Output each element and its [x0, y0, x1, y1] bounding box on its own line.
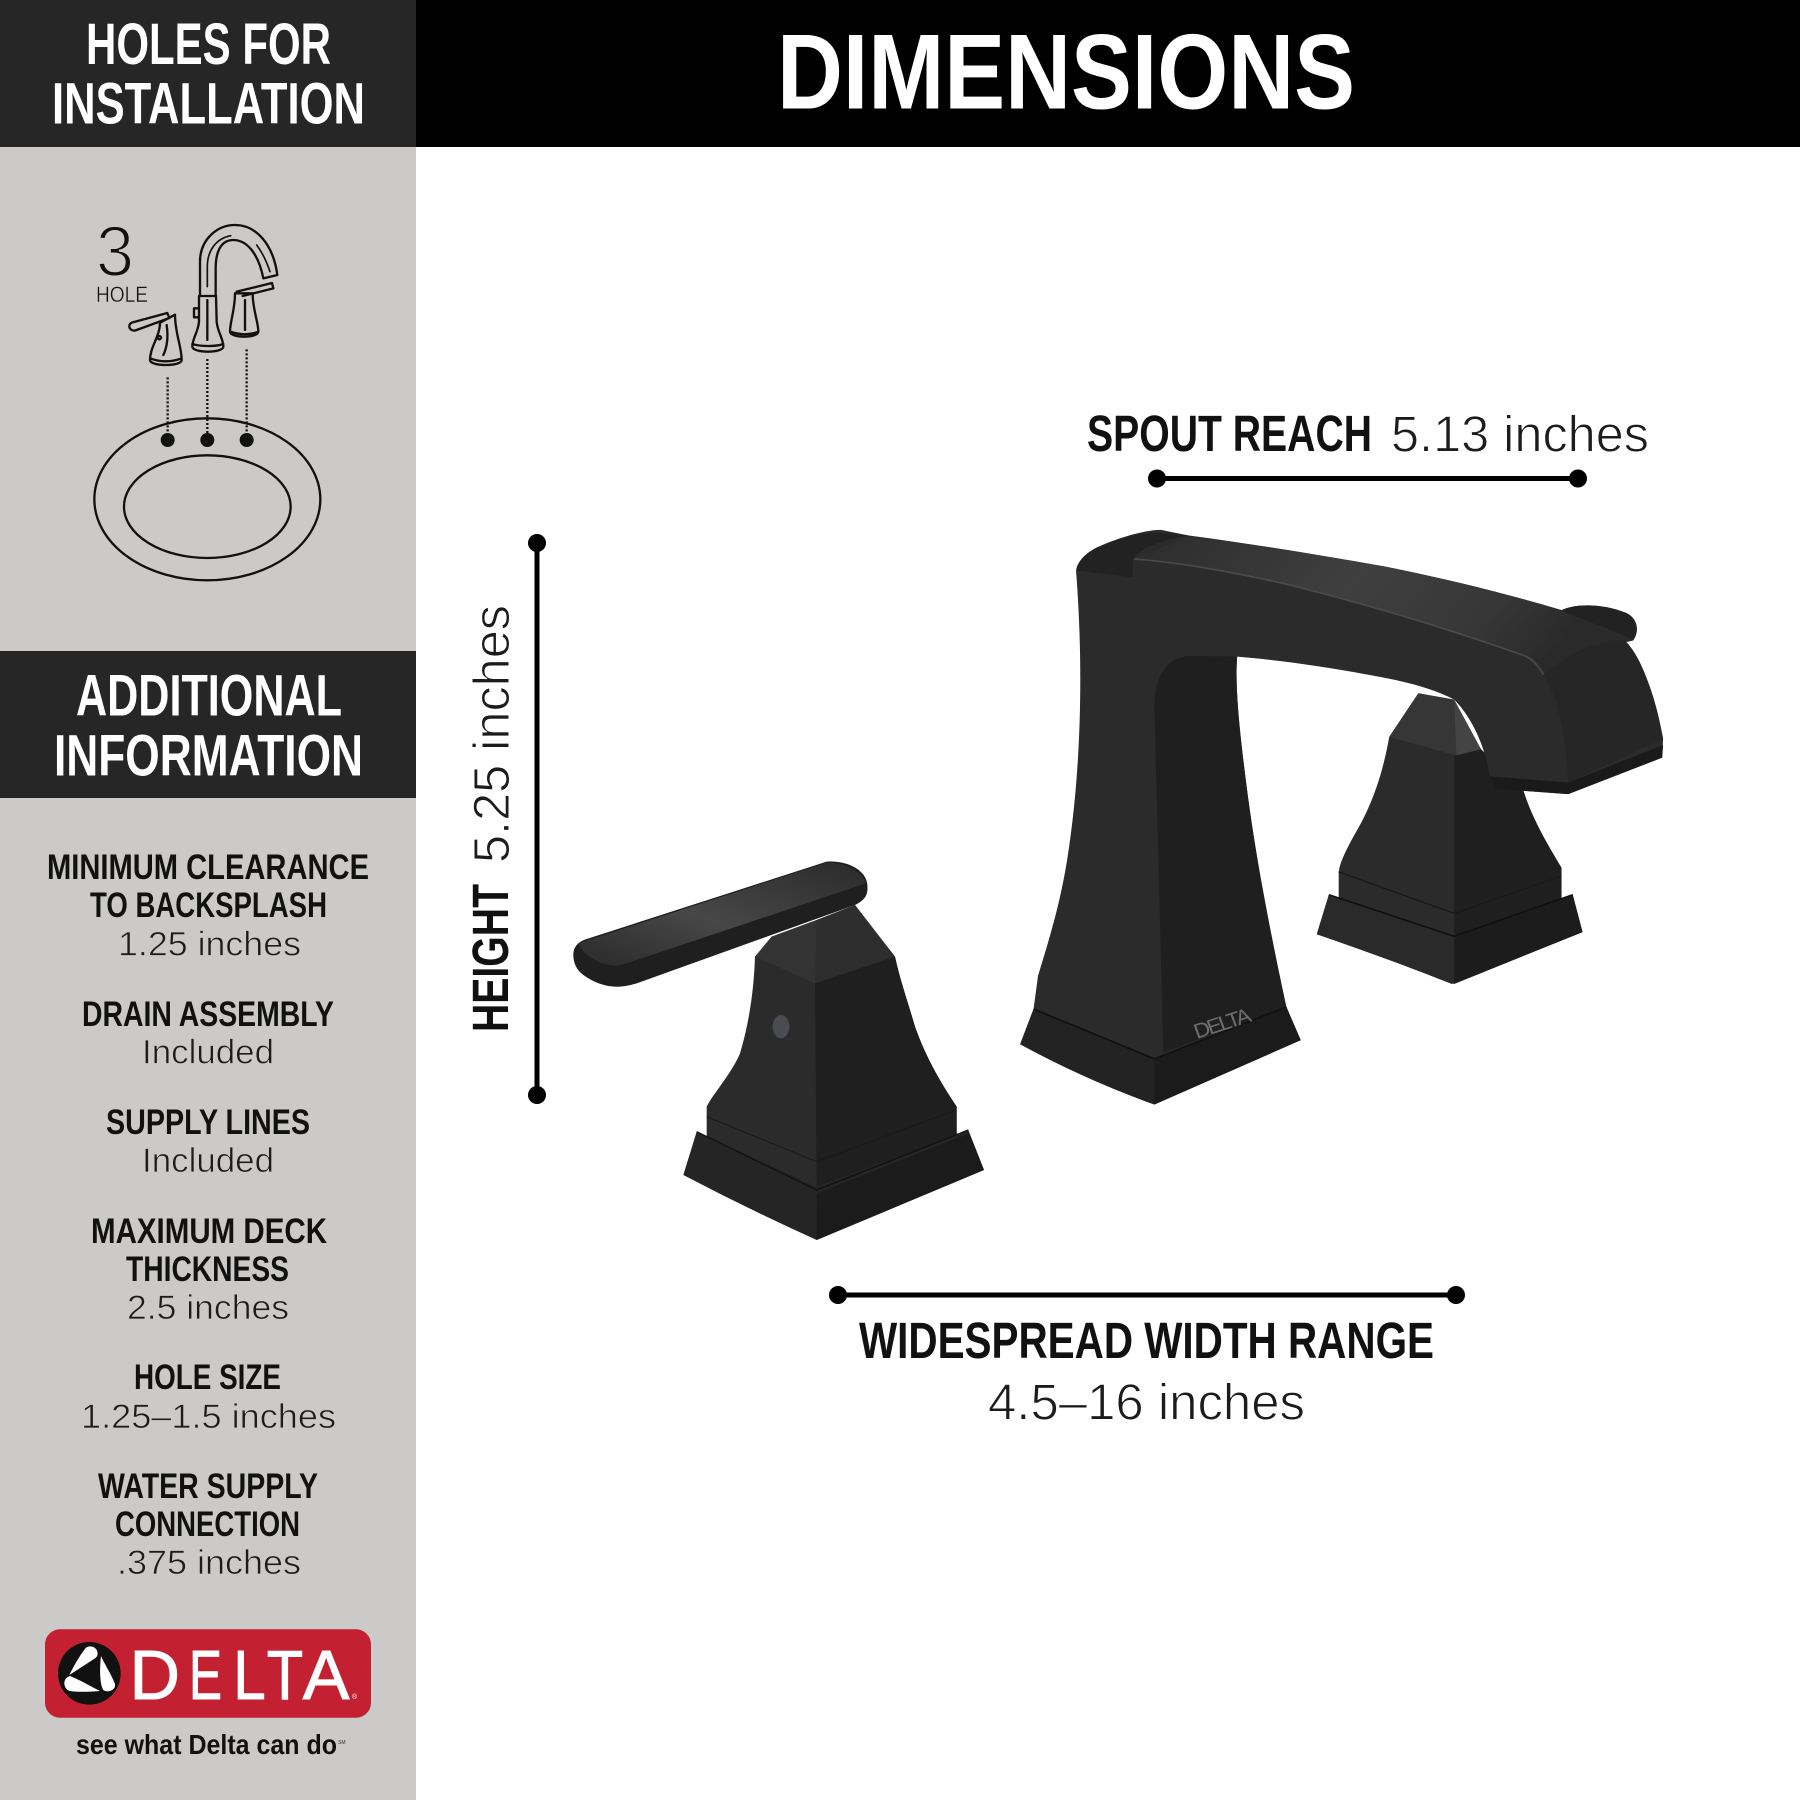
label: widespread width range: 4.5–16 inches [988, 1374, 1305, 1430]
info: water supply connection: WATER SUPPLY [98, 1467, 318, 1506]
icon: 3 hole sink diagram: 3 [96, 213, 134, 292]
heading: holes for installation: HOLES FOR [86, 12, 331, 77]
logo: delta [45, 1629, 371, 1760]
logo: delta: T [267, 1636, 303, 1714]
title: dimensions: DIMENSIONS [777, 12, 1355, 132]
info: minimum clearance: 1.25 inches [118, 926, 301, 964]
heading: holes for installation [0, 0, 416, 147]
info: minimum clearance: TO BACKSPLASH [90, 886, 327, 925]
title: dimensions [416, 0, 1800, 147]
label: height: 5.25 inches [463, 605, 520, 863]
label: widespread width range [859, 1312, 1434, 1430]
info: minimum clearance [47, 848, 369, 964]
icon: 3 hole sink diagram [94, 213, 320, 580]
arrow: widespread width dimension line [829, 1286, 1465, 1304]
label: spout reach: SPOUT REACH [1087, 405, 1372, 462]
image: right handle [1317, 693, 1583, 984]
arrow: height dimension line [528, 534, 546, 1104]
image: center spout: DELTA [1190, 1003, 1255, 1043]
logo: delta: L [233, 1636, 266, 1714]
label: spout reach [1087, 405, 1649, 462]
arrow: spout reach dimension line [1148, 470, 1587, 488]
logo: delta: E [189, 1636, 222, 1714]
info: water supply connection: CONNECTION [115, 1505, 300, 1544]
info: drain assembly: DRAIN ASSEMBLY [82, 995, 334, 1034]
logo: delta: ® [352, 1693, 358, 1701]
info: maximum deck thickness: THICKNESS [126, 1250, 289, 1289]
info: water supply connection [98, 1467, 318, 1582]
info: supply lines: SUPPLY LINES [106, 1103, 310, 1142]
info: supply lines: Included [142, 1142, 274, 1180]
heading: additional information [0, 651, 416, 798]
logo: delta: D [130, 1636, 180, 1714]
info: hole size [81, 1358, 336, 1436]
image: left handle [573, 861, 984, 1240]
info: maximum deck thickness: MAXIMUM DECK [91, 1212, 327, 1251]
label: height: HEIGHT [462, 884, 519, 1032]
heading: additional information: INFORMATION [54, 724, 363, 788]
label: widespread width range: WIDESPREAD WIDTH RANGE [859, 1312, 1434, 1369]
heading: additional information: ADDITIONAL [76, 664, 342, 728]
info: water supply connection: .375 inches [117, 1544, 301, 1582]
logo: delta: A [303, 1636, 350, 1714]
heading: holes for installation: INSTALLATION [52, 72, 365, 136]
image: center spout [1020, 530, 1663, 1105]
info: minimum clearance: MINIMUM CLEARANCE [47, 848, 369, 887]
sidebar panel [0, 0, 416, 1800]
label: height [462, 605, 520, 1032]
info: drain assembly [82, 995, 334, 1072]
logo: delta: see what Delta can do [76, 1729, 337, 1760]
icon: 3 hole sink diagram: HOLE [96, 282, 148, 307]
info: maximum deck thickness: 2.5 inches [127, 1289, 289, 1327]
info: hole size: 1.25–1.5 inches [81, 1398, 336, 1436]
logo: delta: SM [338, 1740, 346, 1746]
info: supply lines [106, 1103, 310, 1180]
info: hole size: HOLE SIZE [134, 1358, 281, 1397]
label: spout reach: 5.13 inches [1391, 406, 1649, 462]
info: maximum deck thickness [91, 1212, 327, 1327]
info: drain assembly: Included [142, 1034, 274, 1072]
